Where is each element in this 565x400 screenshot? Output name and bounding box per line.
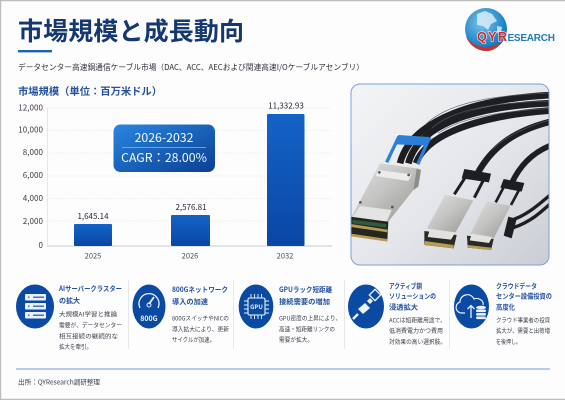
callout: CAGR: CAGR：28.00% xyxy=(121,148,207,166)
bar 2032 xyxy=(267,100,304,262)
bar 2026: 2,576.81 xyxy=(175,202,207,213)
y axis labels xyxy=(18,102,44,251)
callout: CAGR: 2026-2032 xyxy=(135,128,194,146)
text: ACC: ACCは短距離用途で、 xyxy=(389,316,446,324)
text: GPU xyxy=(279,285,341,344)
subtitle: データセンター高速銅通信ケーブル市場（DAC、ACC、AECおよび関連高速I/Oケーブルアセンブリ） xyxy=(18,62,364,73)
text: 800G xyxy=(172,285,229,344)
text: ACC: 対効果の高い選択肢。 xyxy=(389,337,446,346)
bar 2025: 2025 xyxy=(85,250,101,262)
small connector 1 xyxy=(454,177,484,198)
text: cloud: クラウド事業者の投資 xyxy=(496,316,550,324)
bar 2032: 2032 xyxy=(277,250,293,262)
bar 2026: 2026 xyxy=(182,250,198,262)
panel: driver 5 cloud xyxy=(454,280,552,346)
text: 800G: 導入の加速 xyxy=(172,297,208,307)
panel: driver 1 AI server xyxy=(16,284,122,351)
text: AI server: AIサーバークラスター xyxy=(58,284,122,294)
text: cloud: 拡大が、需要と出荷増 xyxy=(496,326,550,335)
bar 2026 xyxy=(171,202,210,262)
big connector xyxy=(352,163,417,222)
text: cloud: 高度化 xyxy=(496,302,515,312)
text: ACC: ソリューションの xyxy=(389,290,436,300)
text: AI server xyxy=(58,284,122,351)
text: cloud: クラウドデータ xyxy=(496,280,537,290)
logo: QYResearch: QYR xyxy=(477,30,507,44)
text: cloud: センター設備投資の xyxy=(496,290,552,300)
text: 800G: 800GスイッチやNICの xyxy=(172,314,229,322)
panel: cable photo xyxy=(350,84,553,265)
icon: gauge: 800G xyxy=(140,314,158,324)
text: GPU: 需要が拡大。 xyxy=(279,335,313,344)
text: ACC: 浸透拡大 xyxy=(389,302,418,312)
panel: driver 4 ACC xyxy=(348,280,446,346)
text: AI server: 相互接続の継続的な xyxy=(59,332,118,340)
title: 市場規模と成長動向 xyxy=(18,12,244,48)
source note: 出所：QYResearch調研整理 xyxy=(18,376,100,386)
text: cloud xyxy=(496,280,552,346)
y axis labels: 4,000 xyxy=(23,193,44,204)
blue pull tab xyxy=(387,138,429,164)
logo: QYResearch xyxy=(465,8,555,51)
text: 800G: サイクルが加速。 xyxy=(172,335,215,344)
icon: server rack xyxy=(16,284,54,328)
text: GPU: GPUラック短距離 xyxy=(279,285,332,295)
bar 2025 xyxy=(74,211,112,262)
small connector 2 xyxy=(494,188,520,206)
text: AI server: 大規模AI学習と推論 xyxy=(59,310,118,318)
panel: driver 3 GPU xyxy=(239,284,341,344)
callout: CAGR xyxy=(114,124,215,172)
text: ACC: アクティブ銅 xyxy=(389,280,422,290)
text: GPU: 接続需要の増加 xyxy=(279,297,330,307)
y axis labels: 6,000 xyxy=(23,170,44,181)
bar 2025: 1,645.14 xyxy=(77,211,109,222)
y axis labels: 8,000 xyxy=(23,147,44,158)
icon: GPU chip: GPU xyxy=(250,302,263,311)
cable highlights xyxy=(425,93,553,150)
text: cloud: を後押し。 xyxy=(496,337,521,346)
text: 800G: 導入拡大により、更新 xyxy=(172,324,229,334)
text: ACC: 低消費電力かつ費用 xyxy=(389,326,443,335)
text: AI server: 拡大を牽引。 xyxy=(59,342,92,351)
text: GPU: GPU密度の上昇により、 xyxy=(279,314,341,322)
y axis labels: 10,000 xyxy=(18,124,43,136)
panel: driver 2 800G xyxy=(132,284,229,344)
icon: cloud upload xyxy=(454,284,489,328)
bar chart xyxy=(18,100,332,262)
text: 800G: 800Gネットワーク xyxy=(172,285,228,295)
icon: active cable xyxy=(348,284,384,328)
text: AI server: 需要が、データセンター xyxy=(59,320,122,330)
logo: QYResearch: ESEARCH xyxy=(508,33,555,44)
chart heading: 市場規模（単位：百万米ドル） xyxy=(18,83,162,98)
text: AI server: の拡大 xyxy=(59,296,80,306)
text: GPU: 高速・短距離リンクの xyxy=(279,324,335,334)
y axis labels: 12,000 xyxy=(18,102,43,114)
black cables xyxy=(400,95,553,228)
bar 2032: 11,332.93 xyxy=(268,100,304,112)
y axis labels: 2,000 xyxy=(23,216,44,227)
text: ACC xyxy=(389,280,446,346)
y axis labels: 0 xyxy=(38,240,44,251)
